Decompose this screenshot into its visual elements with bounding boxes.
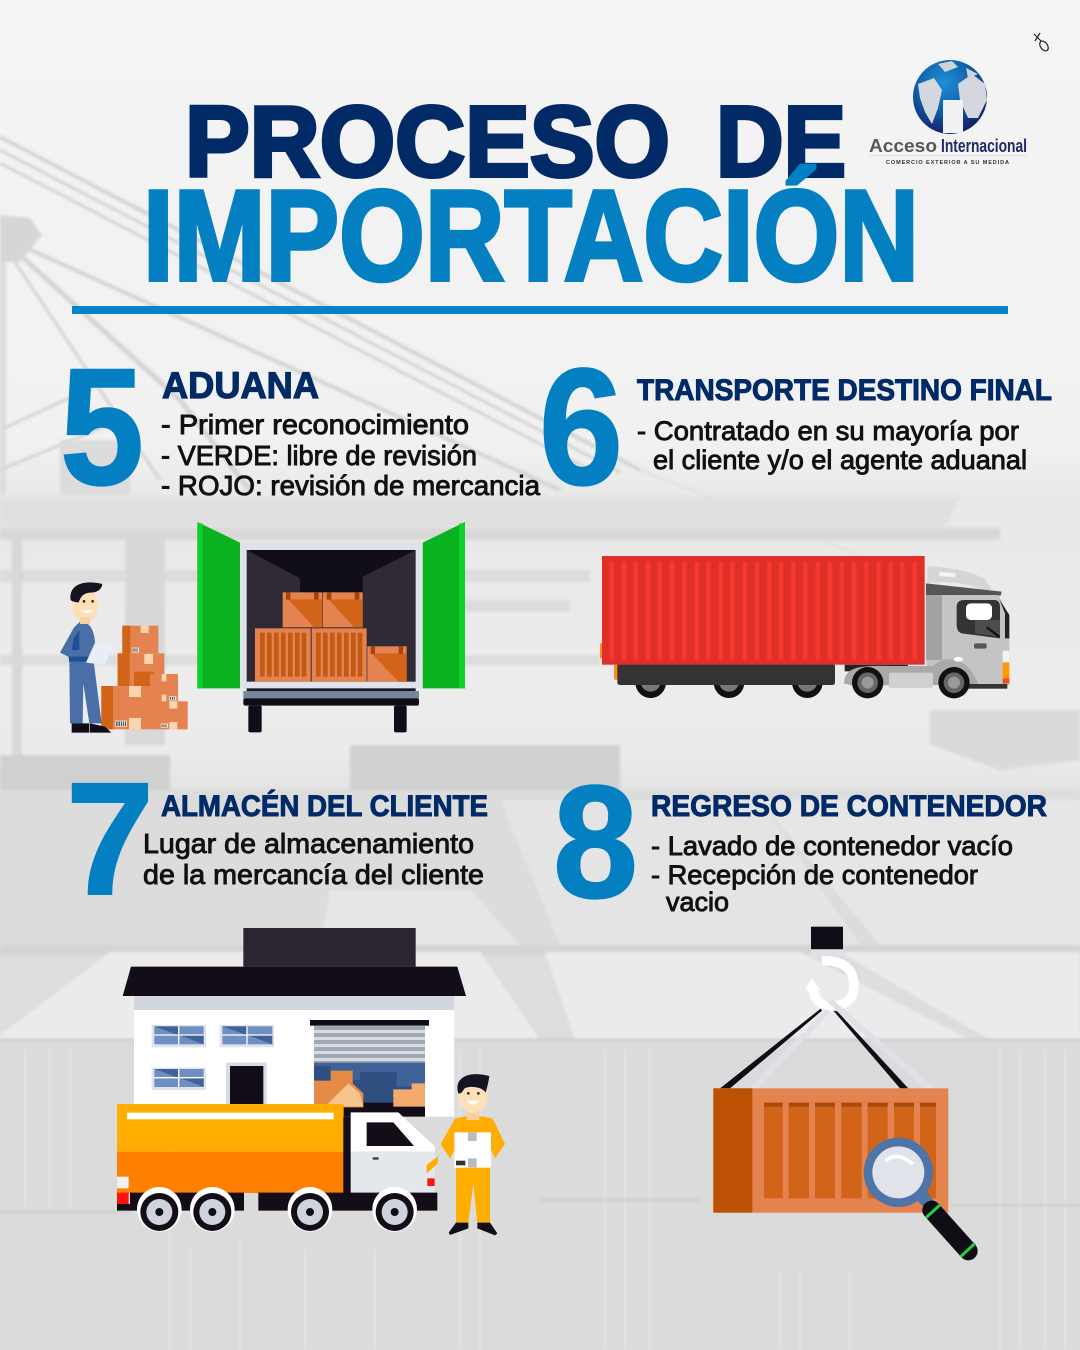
lifting straps xyxy=(720,1000,935,1088)
step 5 body text: - Primer reconocimiento xyxy=(161,409,469,440)
crane hook xyxy=(805,927,854,1006)
step 6 number: 6 xyxy=(539,335,623,520)
logo: Acceso Internacional: Acceso xyxy=(869,136,937,156)
logo: Acceso Internacional xyxy=(869,60,1027,166)
step 6 body text xyxy=(637,416,1027,475)
step 7 body text: Lugar de almacenamiento xyxy=(143,828,474,859)
illustration: warehouse with delivery truck and worker xyxy=(117,928,505,1235)
red shipping container xyxy=(602,556,925,665)
step 5 heading: ADUANA xyxy=(162,365,319,406)
step 5 body text xyxy=(161,409,541,501)
step 6 body text: el cliente y/o el agente aduanal xyxy=(653,445,1027,475)
step 6 heading: TRANSPORTE DESTINO FINAL xyxy=(637,374,1052,407)
step 8 number: 8 xyxy=(553,752,638,931)
tractor cab xyxy=(844,566,1009,698)
truck platform and legs xyxy=(243,688,419,732)
truck wheels xyxy=(137,1187,417,1232)
step 5 body text: - VERDE: libre de revisión xyxy=(161,440,477,471)
stacked boxes in truck xyxy=(255,592,407,682)
pile of cardboard boxes xyxy=(101,626,188,729)
step 7 number: 7 xyxy=(66,749,154,928)
orange container xyxy=(713,1088,948,1213)
left green door xyxy=(197,522,240,688)
step 7 heading: ALMACÉN DEL CLIENTE xyxy=(161,789,488,823)
warehouse building xyxy=(123,928,466,1117)
illustration: container on crane hook with magnifier xyxy=(713,927,975,1257)
title: IMPORTACIÓN: IMPORTACIÓN xyxy=(143,164,919,308)
title: PROCESO DE: PROCESO xyxy=(185,86,670,198)
magnifying glass xyxy=(864,1138,975,1257)
step 8 body text: - Lavado de contenedor vacío xyxy=(651,831,1013,861)
customs officer figure xyxy=(60,582,113,733)
step 5 body text: - ROJO: revisión de mercancia xyxy=(161,470,541,501)
warehouse windows xyxy=(152,1025,274,1090)
title: PROCESO DE: DE xyxy=(716,86,846,198)
logo: Acceso Internacional: Internacional xyxy=(941,136,1027,156)
step 8 body text: vacio xyxy=(666,887,729,917)
trailer chassis xyxy=(600,643,835,685)
illustration: red container truck xyxy=(600,556,1009,698)
warehouse worker holding a box xyxy=(441,1074,505,1235)
step 7 body text: de la mercancía del cliente xyxy=(143,859,484,890)
step 8 heading: REGRESO DE CONTENEDOR xyxy=(651,790,1047,823)
right green door xyxy=(423,522,465,688)
step 8 body text xyxy=(651,831,1013,917)
step 5 number: 5 xyxy=(60,335,144,520)
warehouse door xyxy=(226,1063,267,1104)
orange delivery truck xyxy=(117,1104,438,1211)
step 8 body text: - Recepción de contenedor xyxy=(651,860,978,890)
illustration: customs officer and open truck with boxes xyxy=(60,522,465,733)
truck box interior xyxy=(240,543,423,688)
icon: small cursor mark xyxy=(1034,33,1050,53)
logo: Acceso Internacional: COMERCIO EXTERIOR A SU MEDIDA xyxy=(886,160,1009,166)
step 7 body text xyxy=(143,828,484,890)
roller door with boxes xyxy=(310,1020,429,1117)
step 6 body text: - Contratado en su mayoría por xyxy=(637,416,1019,446)
trailer wheels xyxy=(635,667,823,698)
title divider xyxy=(72,306,1008,314)
